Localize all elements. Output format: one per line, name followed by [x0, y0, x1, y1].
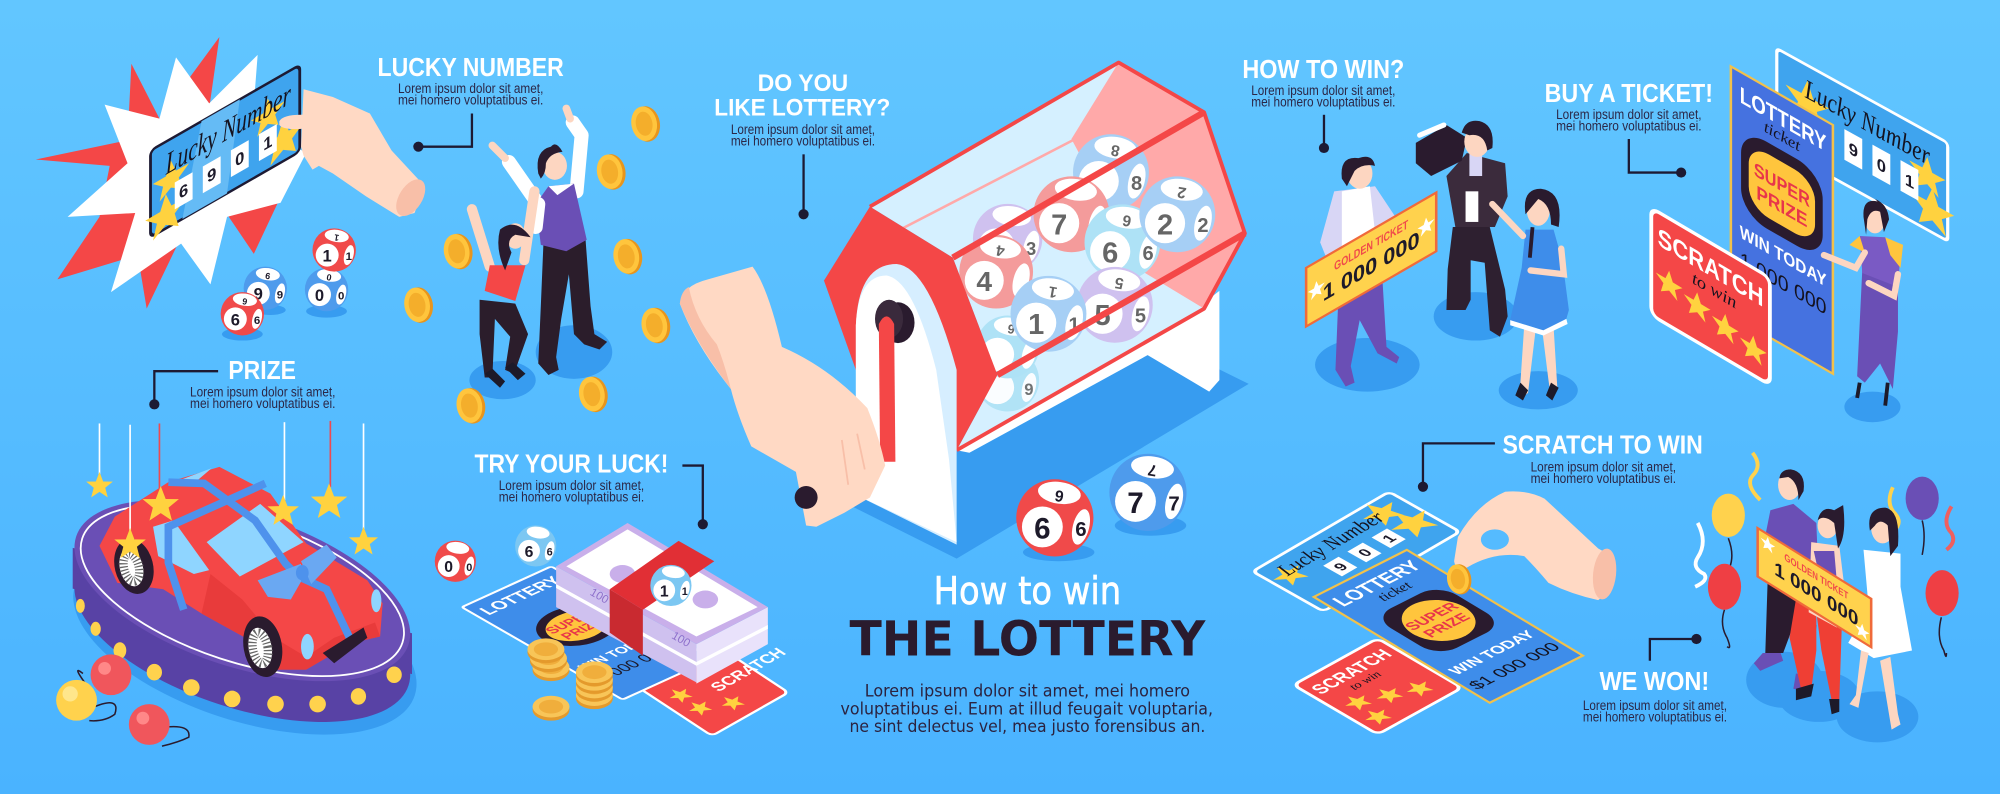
- heading: WE WON!: [1599, 668, 1709, 696]
- heading: [714, 70, 890, 122]
- big balls: 6: [1075, 519, 1087, 541]
- lottery balls: [221, 228, 356, 341]
- lucky number ticket: 1: [1905, 169, 1914, 193]
- lottery balls: 6: [254, 315, 260, 327]
- golden ticket sign: GOLDEN TICKET: [1334, 217, 1408, 274]
- blue lottery ticket: LOTTERY: [475, 574, 567, 617]
- balls: 0: [444, 559, 453, 576]
- blue lottery ticket: 1 000 000: [592, 645, 674, 684]
- stack of banknotes: [556, 523, 768, 684]
- lucky number ticket held in hand: [145, 63, 304, 245]
- lucky number ticket held in hand: 1: [263, 131, 273, 155]
- stack of banknotes: 100: [669, 630, 692, 650]
- red scratch ticket: SCRATCH: [706, 645, 790, 694]
- balls inside drum: 5: [1135, 306, 1146, 328]
- description: Lorem ipsum dolor sit amet,: [1583, 698, 1727, 713]
- blue lottery ticket: WIN TODAY: [574, 632, 659, 672]
- red scratch ticket: [640, 628, 820, 736]
- lucky number ticket: 9: [1849, 138, 1858, 162]
- blue lottery ticket: PRIZE: [557, 617, 608, 641]
- lottery floor ticket: ticket: [1373, 580, 1418, 604]
- panel: try your luck: [435, 451, 820, 736]
- lucky number ticket held in hand: Lucky Number: [165, 77, 291, 183]
- balls inside drum: 6: [1102, 237, 1118, 269]
- man with golden ticket: [1306, 157, 1436, 392]
- leader line: [682, 466, 708, 529]
- lottery balls: 6: [241, 296, 248, 307]
- woman in white: [1848, 550, 1912, 658]
- cameraman: [1416, 121, 1518, 341]
- reporter woman: [1492, 189, 1578, 409]
- panel: scratch to win: [1253, 431, 1703, 734]
- back stand: [1134, 291, 1219, 392]
- description: mei homero voluptatibus ei.: [190, 396, 335, 411]
- lucky number floor ticket: Lucky Number: [1270, 508, 1391, 579]
- lucky number ticket held in hand: 0: [235, 147, 244, 171]
- lucky number ticket held in hand: 6: [179, 179, 188, 203]
- starburst: red: [36, 37, 283, 309]
- panel: lucky number: [36, 37, 673, 426]
- intro text: [841, 681, 1213, 737]
- red scratch floor ticket: SCRATCH: [1307, 647, 1397, 697]
- scratch ticket: to win: [1692, 268, 1736, 314]
- lottery ticket: [1731, 66, 1833, 374]
- heading: TRY YOUR LUCK!: [474, 451, 668, 479]
- description: mei homero voluptatibus ei.: [1251, 95, 1395, 110]
- balls: [435, 525, 556, 582]
- balls inside drum: 2: [1176, 183, 1188, 201]
- balls inside drum: 6: [1143, 243, 1154, 265]
- lucky number floor ticket: 1: [1379, 532, 1401, 545]
- main title: THE LOTTERY: [849, 612, 1206, 668]
- lottery ticket: 1 000 000: [1740, 247, 1827, 320]
- description: mei homero voluptatibus ei.: [1583, 709, 1727, 724]
- description: Lorem ipsum dolor sit amet,: [398, 81, 543, 96]
- leader line: [149, 371, 218, 409]
- lottery balls: 1: [323, 246, 332, 265]
- lottery floor ticket: [1314, 550, 1583, 703]
- description: mei homero voluptatibus ei.: [499, 489, 644, 504]
- lottery ticket: WIN TODAY: [1740, 222, 1827, 292]
- red car with ribbon: [99, 467, 383, 680]
- description: [1556, 107, 1702, 134]
- red scratch floor ticket: to win: [1345, 669, 1385, 692]
- description: mei homero voluptatibus ei.: [1531, 471, 1676, 486]
- description: Lorem ipsum dolor sit amet,: [190, 385, 335, 400]
- lottery balls: 0: [315, 286, 324, 305]
- lottery balls: 0: [338, 291, 344, 303]
- description: [190, 385, 335, 411]
- lottery floor ticket: WIN TODAY: [1445, 628, 1540, 677]
- golden ticket sign: [1306, 193, 1436, 327]
- lottery floor ticket: PRIZE: [1420, 611, 1475, 640]
- big balls: 7: [1127, 487, 1144, 520]
- lottery ticket: SUPER: [1754, 159, 1810, 212]
- balls: 6: [525, 544, 534, 561]
- description: Lorem ipsum dolor sit amet,: [1251, 83, 1395, 98]
- balls inside drum: 3: [1026, 238, 1036, 259]
- lottery ticket: LOTTERY: [1740, 83, 1827, 158]
- lottery floor ticket: SUPER: [1402, 600, 1463, 633]
- balls inside drum: 2: [1197, 215, 1209, 237]
- subtitle: How to win: [934, 569, 1121, 614]
- balls inside drum: 5: [1094, 300, 1111, 332]
- drum body: [824, 62, 1245, 453]
- description: Lorem ipsum dolor sit amet,: [499, 478, 644, 493]
- golden ticket sign: [1758, 528, 1871, 647]
- stack of banknotes: 1: [660, 583, 669, 600]
- balls inside drum: 7: [1051, 209, 1067, 241]
- celebrating couple: [469, 108, 612, 399]
- balls: 6: [547, 547, 553, 559]
- lottery floor ticket: LOTTERY: [1328, 557, 1427, 610]
- lottery balls: 1: [333, 232, 340, 243]
- starburst: white: [68, 55, 306, 292]
- floor balloons: [56, 654, 189, 746]
- panel: prize: [50, 357, 440, 772]
- golden ticket sign: GOLDEN TICKET: [1784, 552, 1848, 603]
- leader line: [1650, 634, 1702, 661]
- lucky number floor ticket: 0: [1354, 547, 1377, 559]
- red front face: [824, 207, 997, 450]
- heading: BUY A TICKET!: [1545, 80, 1713, 108]
- description: mei homero voluptatibus ei.: [1556, 119, 1702, 134]
- crank: [875, 300, 915, 462]
- heading: HOW TO WIN?: [1242, 56, 1404, 84]
- description: [398, 81, 543, 108]
- intro text: Lorem ipsum dolor sit amet, mei homero: [865, 681, 1190, 701]
- lottery ticket: ticket: [1764, 116, 1801, 156]
- lucky number floor ticket: 9: [1330, 561, 1352, 574]
- leader line: [798, 154, 809, 219]
- balls inside drum: 6: [1121, 211, 1133, 229]
- stack of banknotes: 100: [588, 587, 610, 607]
- lucky number floor ticket: [1253, 491, 1461, 611]
- big balls: 7: [1168, 494, 1180, 516]
- stack of banknotes: 1: [682, 586, 688, 598]
- hand turning crank: [680, 267, 885, 527]
- description: [499, 478, 644, 504]
- heading: PRIZE: [228, 357, 296, 385]
- description: Lorem ipsum dolor sit amet,: [1556, 107, 1702, 122]
- lottery balls: 9: [277, 289, 283, 301]
- panel: how to win: [1242, 56, 1578, 409]
- red rails: [870, 62, 1245, 450]
- golden ticket sign: 1 000 000: [1323, 226, 1420, 306]
- front stand: [856, 264, 957, 545]
- balls inside drum: 1: [1028, 309, 1044, 341]
- lottery balls: 6: [231, 310, 240, 329]
- lottery balls: 0: [326, 272, 332, 283]
- panel: buy a ticket: [1545, 48, 1954, 422]
- blue lottery ticket: SUPER: [541, 608, 599, 636]
- balls inside drum: 4: [994, 241, 1006, 259]
- leader line: [1418, 443, 1495, 492]
- balls inside drum: 6: [1006, 321, 1016, 337]
- lucky number ticket held in hand: 9: [207, 163, 216, 187]
- heading: SCRATCH TO WIN: [1503, 431, 1703, 459]
- heading: DO YOU: [758, 70, 848, 97]
- description: Lorem ipsum dolor sit amet,: [1531, 459, 1676, 474]
- lottery balls: 9: [264, 271, 271, 281]
- balls: 0: [466, 562, 472, 574]
- big balls: 6: [1034, 512, 1051, 545]
- balls inside drum: 2: [1157, 209, 1173, 241]
- balls inside drum: 8: [1131, 173, 1142, 195]
- coin stacks: [527, 638, 613, 721]
- leader line: [413, 114, 472, 152]
- big balls: [1016, 454, 1187, 561]
- presenter woman: [1824, 199, 1903, 422]
- description: Lorem ipsum dolor sit amet,: [731, 122, 875, 137]
- platform: [50, 464, 440, 772]
- description: [1251, 83, 1395, 110]
- title: [841, 569, 1213, 737]
- winners group: [1746, 469, 1918, 742]
- lucky number ticket: [1777, 48, 1954, 245]
- balls inside drum: [959, 134, 1215, 412]
- heading: LUCKY NUMBER: [378, 54, 564, 82]
- red scratch floor ticket: [1293, 638, 1462, 734]
- balls inside drum: 4: [976, 265, 992, 297]
- heading: LIKE LOTTERY?: [714, 95, 890, 122]
- panel: we won: [1583, 453, 1959, 742]
- scratch ticket: SCRATCH: [1658, 222, 1764, 313]
- leader line: [1319, 115, 1329, 153]
- description: [731, 122, 875, 148]
- hand holding ticket: [279, 89, 431, 221]
- lucky number ticket: 0: [1877, 154, 1886, 178]
- lottery balls: 9: [254, 285, 263, 304]
- balls inside drum: 5: [1113, 273, 1125, 292]
- intro text: ne sint delectus vel, mea justo forensibus an.: [849, 717, 1205, 737]
- lucky number ticket: Lucky Number: [1804, 72, 1930, 173]
- balls inside drum: 1: [1069, 315, 1080, 337]
- balls inside drum: 9: [1024, 380, 1034, 399]
- golden ticket sign: 1 000 000: [1774, 558, 1858, 631]
- lottery ticket: PRIZE: [1756, 182, 1807, 232]
- big balls: 6: [1053, 486, 1065, 504]
- balls inside drum: 1: [1047, 282, 1059, 301]
- woman in red: [1790, 599, 1842, 700]
- hanging stars: [86, 421, 378, 558]
- hand scratching with coin: [1445, 491, 1619, 601]
- description: mei homero voluptatibus ei.: [398, 93, 543, 108]
- description: [1531, 459, 1676, 486]
- blue lottery ticket: [462, 566, 712, 700]
- gold coins: [402, 104, 673, 426]
- leader line: [1629, 139, 1686, 178]
- description: [1583, 698, 1727, 724]
- scratch ticket: [1651, 208, 1770, 385]
- panel: lottery drum: [680, 62, 1249, 561]
- intro text: voluptatibus ei. Eum at illud feugait voluptaria,: [841, 699, 1213, 719]
- description: mei homero voluptatibus ei.: [731, 133, 875, 148]
- drum shadow: [842, 334, 1249, 559]
- balloons and streamers: [1695, 453, 1959, 656]
- lottery floor ticket: $1 000 000: [1464, 640, 1565, 692]
- big balls: 7: [1147, 460, 1158, 479]
- lottery balls: 1: [346, 251, 353, 263]
- man: [1765, 574, 1816, 689]
- balls inside drum: 8: [1109, 141, 1121, 159]
